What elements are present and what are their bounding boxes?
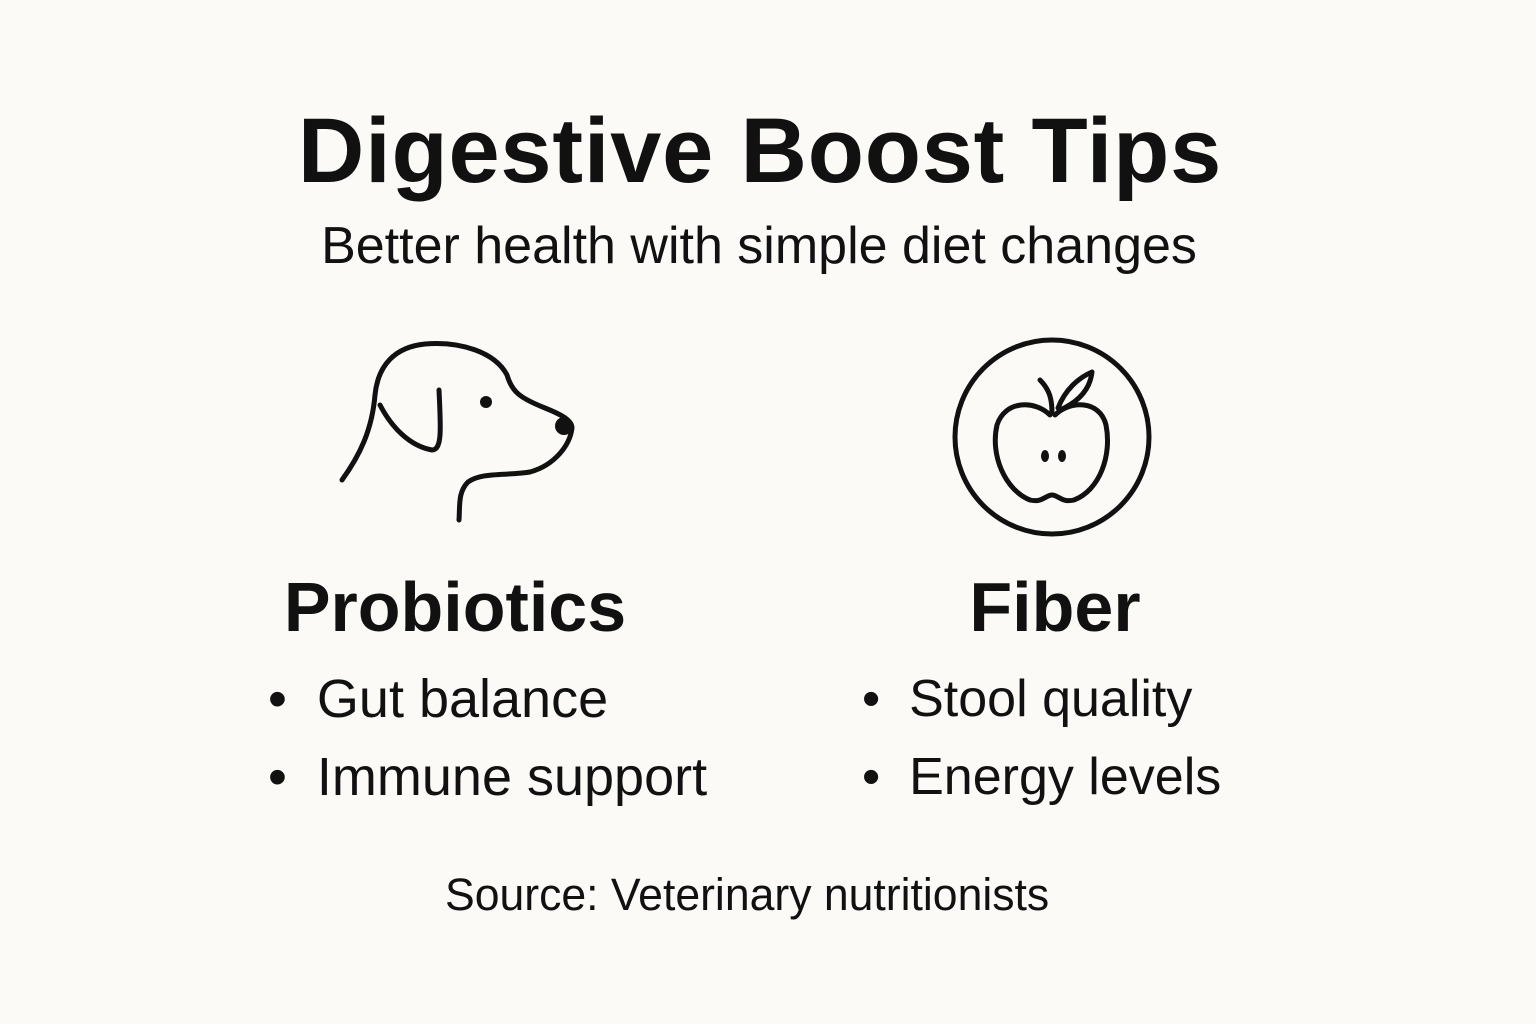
list: probiotics benefits — [268, 669, 707, 807]
title: Digestive Boost Tips — [298, 100, 1222, 202]
icon: dog head — [340, 341, 574, 522]
list: probiotics benefits: • Immune support — [268, 747, 707, 807]
list: fiber benefits: • Energy levels — [862, 748, 1221, 806]
subtitle: Better health with simple diet changes — [321, 217, 1197, 275]
icon: apple in circle — [952, 338, 1152, 536]
list: fiber benefits — [862, 670, 1221, 806]
source note: Source: Veterinary nutritionists — [445, 869, 1049, 920]
heading: Probiotics: Probiotics — [284, 568, 626, 646]
heading: Fiber: Fiber — [969, 568, 1141, 646]
list: probiotics benefits: • Gut balance — [268, 669, 608, 729]
list: fiber benefits: • Stool quality — [862, 670, 1192, 728]
